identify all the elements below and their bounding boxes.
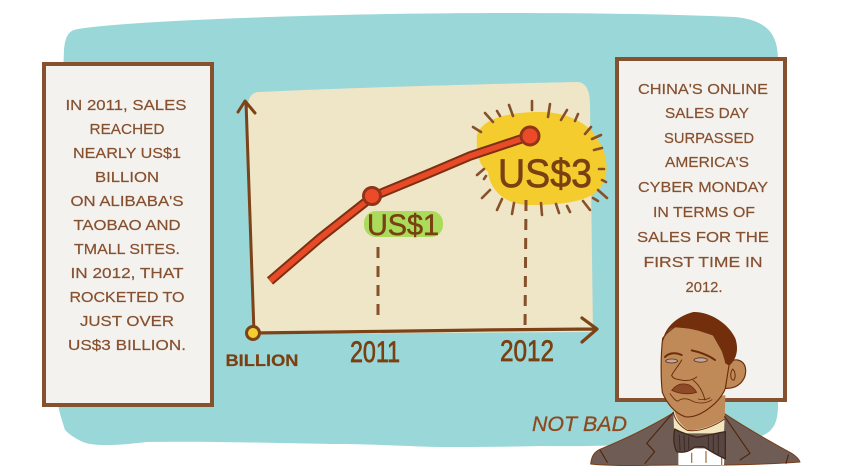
- panel: left text box: [44, 64, 212, 405]
- face: [661, 327, 729, 417]
- dashed guide 2011: [376, 247, 380, 323]
- panel: right text box: FIRST TIME IN: [644, 254, 762, 271]
- panel: right text box: SURPASSED: [664, 130, 754, 147]
- caption: not bad: NOT BAD: [532, 413, 627, 436]
- panel: right text box: CHINA'S ONLINE: [638, 81, 768, 98]
- panel: left text box: BILLION: [95, 169, 159, 186]
- data point 2011: [364, 188, 380, 204]
- panel: left text box: IN 2011, SALES: [66, 97, 186, 114]
- collar: [673, 412, 725, 433]
- hair: [663, 312, 737, 366]
- data line: [270, 136, 530, 281]
- panel: right text box: [617, 59, 785, 400]
- illustration: man in suit and bow tie: [591, 312, 800, 466]
- label: US$3: US$3: [498, 152, 592, 196]
- chart background: [248, 82, 593, 334]
- data point 2012: [521, 127, 539, 145]
- panel: right text box: IN TERMS OF: [653, 204, 755, 221]
- brows: [665, 350, 715, 360]
- panel: left text box: ROCKETED TO: [70, 289, 184, 306]
- mouth: [672, 384, 697, 394]
- panel: left text box: JUST OVER: [80, 313, 174, 330]
- panel: right text box: CYBER MONDAY: [638, 179, 768, 196]
- panel: left text box: IN 2012, THAT: [70, 265, 184, 282]
- origin marker: [246, 326, 260, 340]
- panel: right text box: AMERICA'S: [665, 154, 749, 171]
- panel: right text box: SALES DAY: [665, 105, 749, 122]
- chart: sales line chart: [226, 82, 607, 370]
- teal background blob: [58, 13, 778, 447]
- y axis arrow: [238, 101, 255, 333]
- ear: [725, 360, 746, 388]
- label: Billion: BILLION: [226, 351, 298, 370]
- dashed guide 2012: [525, 200, 526, 330]
- eyes: [666, 359, 678, 363]
- panel: left text box: TAOBAO AND: [74, 217, 181, 234]
- panel: left text box: REACHED: [90, 121, 165, 138]
- panel: left text box: ON ALIBABA'S: [70, 193, 184, 210]
- panel: left text box: US$3 BILLION.: [68, 337, 186, 354]
- shirt stripes: [692, 452, 722, 465]
- x axis arrow: [254, 318, 597, 342]
- sunburst highlight: [473, 101, 607, 215]
- chin lines: [670, 394, 712, 403]
- panel: left text box: NEARLY US$1: [73, 145, 181, 162]
- panel: right text box: 2012.: [686, 279, 722, 296]
- bow tie: [674, 429, 725, 459]
- nose and folds: [672, 360, 705, 400]
- panel: right text box: SALES FOR THE: [637, 229, 769, 246]
- label: 2011: 2011: [350, 336, 400, 369]
- label: US$1: US$1: [367, 209, 439, 242]
- label: 2012: 2012: [500, 335, 554, 368]
- panel: left text box: TMALL SITES.: [74, 241, 180, 258]
- shirt: [678, 448, 725, 465]
- suit: [591, 413, 800, 466]
- lapels: [645, 412, 750, 463]
- neck: [674, 395, 725, 430]
